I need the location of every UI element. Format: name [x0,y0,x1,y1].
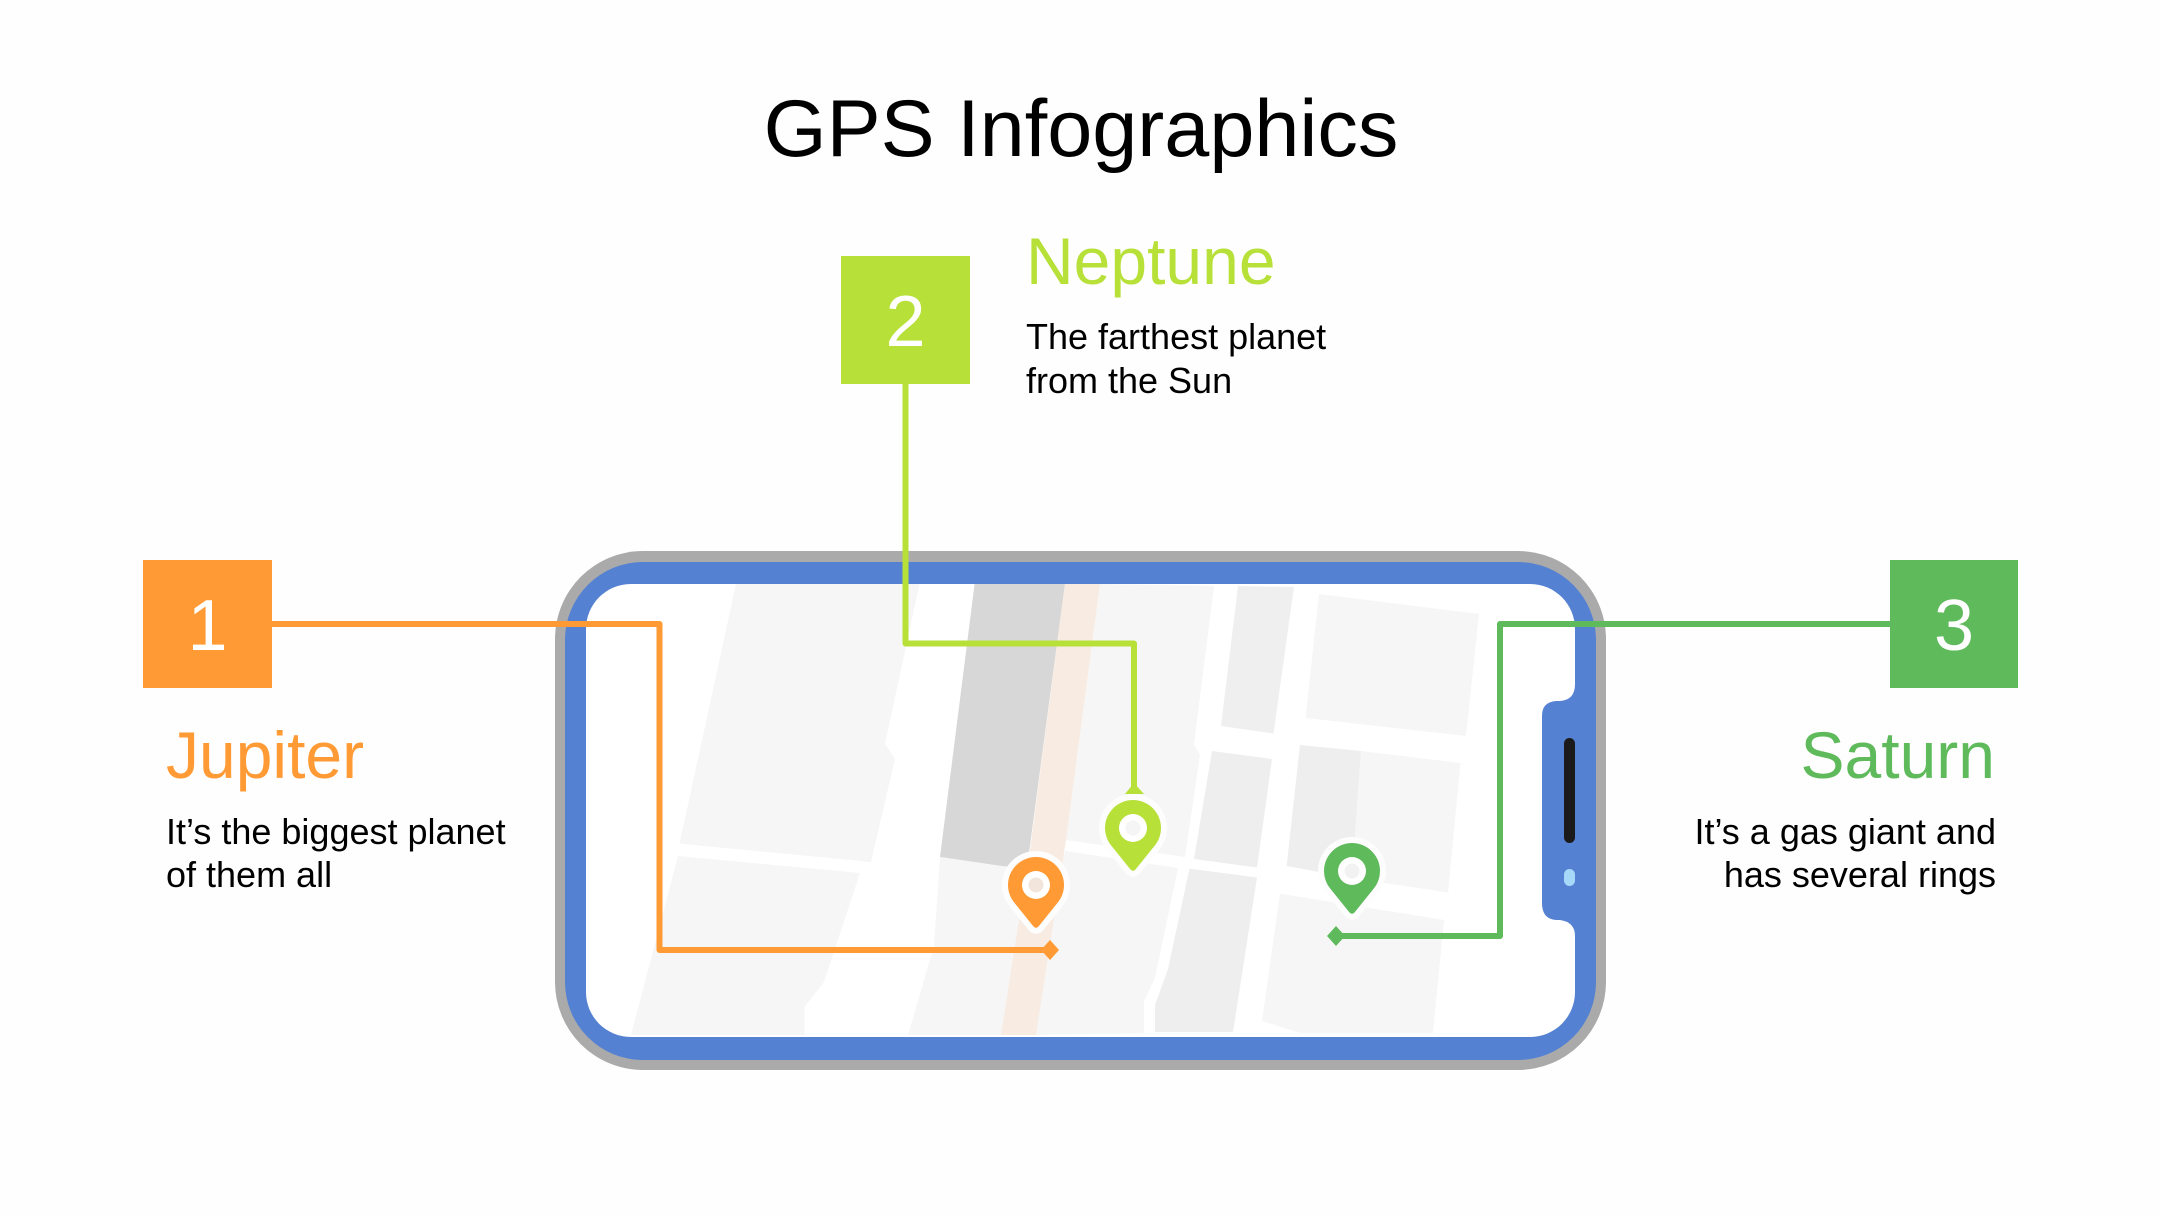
text block: Neptune: from the Sun [1026,360,1232,401]
connector: Neptune [906,384,1144,794]
camera [1564,869,1575,886]
pin: Saturn [1324,843,1380,914]
badge 3 [1890,560,2018,688]
map blocks [631,584,1479,1035]
text block: Neptune: The farthest planet [1026,316,1326,357]
badge 1 [143,560,272,688]
connector: Saturn [1327,624,1890,946]
title: GPS Infographics [764,84,1398,174]
phone with map [555,551,1606,1070]
phone screen [586,584,1575,1037]
badge 3: 3 [1934,586,1974,666]
text block: Jupiter: Jupiter [166,718,364,792]
speaker [1564,738,1575,843]
badge 1: 1 [187,586,228,666]
pin: Neptune [1105,800,1161,871]
text block: Neptune [1026,224,1326,401]
text block: Jupiter: It’s the biggest planet [166,811,506,852]
badge 2: 2 [885,282,926,362]
text block: Saturn: It’s a gas giant and [1694,811,1996,852]
pin: Jupiter [1008,857,1064,928]
text block: Jupiter: of them all [166,854,332,895]
connector: Jupiter [272,624,1059,960]
text block: Saturn: has several rings [1724,854,1996,895]
phone frame [555,551,1606,1070]
text block: Saturn [1694,718,1996,895]
text block: Jupiter [166,718,506,895]
text block: Neptune: Neptune [1026,224,1276,298]
text block: Saturn: Saturn [1801,718,1995,792]
badge 2 [841,256,970,384]
